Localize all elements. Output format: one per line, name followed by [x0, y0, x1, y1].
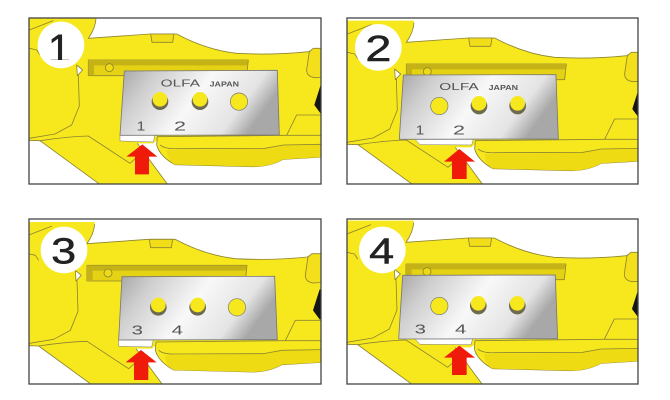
arrow — [126, 350, 157, 380]
tool body — [348, 220, 638, 384]
arrow — [444, 346, 475, 375]
tool body — [30, 222, 320, 384]
blade: 1 — [137, 119, 145, 134]
blade: 4 — [455, 322, 467, 337]
blade: 1 — [416, 122, 424, 137]
arrow — [126, 144, 157, 174]
frame — [29, 18, 321, 184]
blade — [399, 75, 558, 145]
arrow — [444, 149, 475, 179]
number badge — [38, 22, 84, 72]
number badge — [359, 227, 406, 273]
number badge: 2 — [365, 28, 391, 69]
frame — [347, 219, 638, 384]
frame — [29, 219, 321, 384]
number badge: 3 — [51, 231, 76, 271]
panel 1 — [28, 17, 322, 185]
number badge: 1 — [48, 26, 71, 72]
number badge — [355, 24, 402, 71]
blade: 2 — [174, 119, 186, 134]
blade: OLFA — [439, 82, 479, 93]
number badge: 4 — [369, 231, 394, 272]
panel 2 — [346, 17, 639, 185]
blade — [120, 70, 279, 142]
blade: 3 — [415, 322, 426, 337]
panel 3 — [28, 218, 322, 385]
blade — [399, 275, 558, 345]
blade: JAPAN — [210, 82, 239, 89]
frame — [347, 18, 638, 184]
tool body — [348, 20, 638, 184]
blade: OLFA — [161, 79, 200, 90]
tool body — [30, 18, 320, 184]
blade: 3 — [132, 323, 143, 338]
blade: JAPAN — [489, 85, 518, 92]
panel 4 — [346, 218, 639, 385]
blade: 4 — [172, 323, 184, 338]
blade — [119, 276, 277, 347]
blade: 2 — [453, 122, 465, 137]
number badge — [41, 227, 87, 273]
